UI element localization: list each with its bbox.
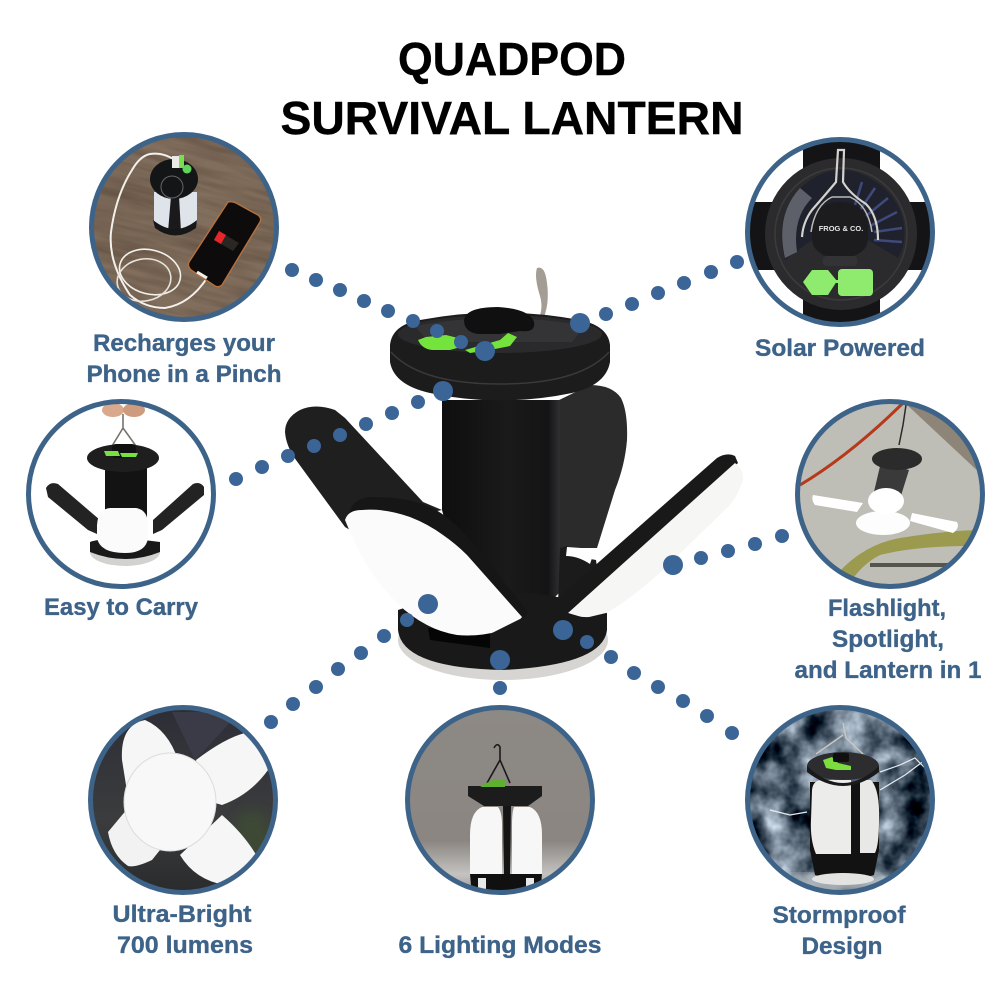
photo: top of lantern: FROG & CO. xyxy=(819,224,863,233)
connector dots: solar xyxy=(570,255,744,333)
right panel xyxy=(558,454,738,613)
label: solar powered: Solar Powered xyxy=(755,335,925,362)
connector dots: stormproof xyxy=(553,620,739,740)
panel: lighting modes xyxy=(407,707,593,897)
title xyxy=(280,33,744,144)
title: SURVIVAL LANTERN xyxy=(280,92,744,144)
connector dots: ultra-bright xyxy=(264,594,438,729)
charging cable xyxy=(111,154,207,308)
label: flashlight, spotlight, and lantern in 1: Spotlight, xyxy=(832,626,944,653)
solar panel arc xyxy=(782,170,905,262)
base underside xyxy=(398,600,608,680)
label: stormproof design xyxy=(772,902,907,960)
title: QUADPOD xyxy=(398,33,626,85)
center hub with logo xyxy=(812,202,868,257)
label: easy to carry: Easy to Carry xyxy=(44,594,199,621)
panel: easy to carry xyxy=(28,401,214,587)
connector behind right panel xyxy=(558,546,600,604)
label: stormproof design: Design xyxy=(802,933,882,960)
label: stormproof design: Stormproof xyxy=(772,902,907,929)
left flap back xyxy=(285,406,442,530)
photo: hanging lit lantern xyxy=(798,402,985,590)
label: recharges your phone xyxy=(86,330,282,388)
label: flashlight, spotlight, and lantern in 1: and Lantern in 1 xyxy=(794,657,982,684)
label: flashlight, spotlight, and lantern in 1: Flashlight, xyxy=(828,595,946,622)
photo: lantern and phone on wood xyxy=(94,137,274,317)
label: flashlight, spotlight, and lantern in 1 xyxy=(794,595,982,684)
back flap xyxy=(555,385,627,548)
label: ultra-bright 700 lumens: Ultra-Bright xyxy=(112,901,252,928)
lantern column xyxy=(442,400,560,612)
connector dots: lighting modes xyxy=(490,650,510,723)
petals xyxy=(122,720,176,786)
photo: lantern in a storm xyxy=(747,707,933,894)
connector dots: carry xyxy=(229,381,453,486)
indicator dots xyxy=(823,256,857,266)
panel: recharges phone xyxy=(89,132,279,322)
label: ultra-bright 700 lumens: 700 lumens xyxy=(117,932,253,959)
low battery icon xyxy=(214,231,239,251)
base hub right xyxy=(490,598,606,650)
phone xyxy=(188,202,261,287)
panel: flashlight, spotlight, lantern xyxy=(798,402,985,590)
label: 6 lighting modes: 6 Lighting Modes xyxy=(398,932,602,959)
connector dots: recharges xyxy=(285,263,495,361)
green power button xyxy=(803,270,837,295)
connector dots: flashlight xyxy=(663,529,789,575)
top knob xyxy=(464,307,534,334)
left front panel xyxy=(345,497,528,628)
top disc xyxy=(390,312,610,400)
panel: ultra-bright xyxy=(90,707,276,893)
green switch xyxy=(418,333,517,353)
label: ultra-bright 700 lumens xyxy=(112,901,253,959)
panel: solar powered xyxy=(747,139,933,325)
photo: lantern held by hook xyxy=(46,404,204,566)
photo: four glowing panels from below xyxy=(90,707,276,893)
label: recharges your phone: Recharges your xyxy=(93,330,275,357)
central product: quadpod lantern xyxy=(285,268,743,680)
panel: stormproof xyxy=(747,707,933,894)
glow wings xyxy=(812,495,863,512)
label: recharges your phone: Phone in a Pinch xyxy=(86,361,282,388)
wire hook xyxy=(802,150,878,240)
photo: lit closed lantern xyxy=(407,707,593,897)
top hook xyxy=(536,268,548,322)
column xyxy=(874,467,909,494)
small lantern xyxy=(154,192,197,231)
photo: top of lantern xyxy=(747,139,933,325)
